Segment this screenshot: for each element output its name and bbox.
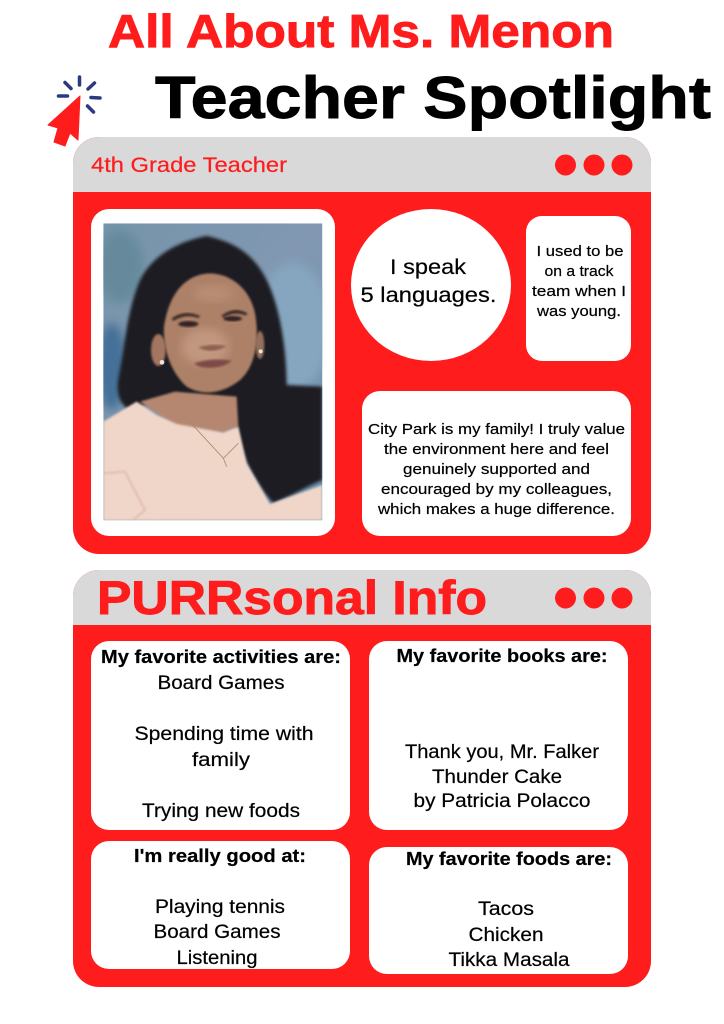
card: favorite books: My favorite books are: [396,646,608,666]
fact bubble: languages: 5 languages. [360,284,496,307]
card: favorite activities: Trying new foods [142,801,300,822]
card: favorite foods: Tikka Masala [448,950,570,971]
card: favorite activities: family [192,750,251,771]
card: favorite foods [369,847,628,974]
panel header bar [73,570,651,625]
quote card: City Park: encouraged by my colleagues, [381,481,612,498]
card: really good at: Board Games [154,922,280,943]
fact card: track team: was young. [536,303,621,320]
card: favorite books: by Patricia Polacco [414,791,590,812]
card: favorite foods: Chicken [468,925,544,946]
quote card: City Park [362,391,631,536]
card: favorite foods: Tacos [478,899,534,920]
card: favorite activities: Board Games [158,673,284,694]
panel: PURRsonal Info window [73,570,651,987]
title: All About Ms. Menon [108,5,614,57]
quote card: City Park: which makes a huge difference. [377,501,615,518]
panel body [73,570,651,987]
card: really good at [91,841,350,969]
fact card: track team [526,216,631,361]
fact bubble: languages [351,209,511,361]
card: favorite books [369,641,628,830]
section heading: PURRsonal Info [97,571,487,624]
card: favorite activities: Spending time with [134,724,314,745]
card: really good at: Listening [176,948,258,969]
card: really good at: Playing tennis [155,897,285,918]
window dots [555,154,632,176]
card: favorite foods: My favorite foods are: [406,849,612,869]
card: favorite books: Thunder Cake [432,767,562,788]
subtitle: Teacher Spotlight [155,65,711,131]
card: favorite books: Thank you, Mr. Falker [405,742,600,763]
window dots [555,588,632,608]
fact card: track team: on a track [544,263,614,280]
photo of Ms. Menon [97,223,330,520]
card: favorite activities [91,641,350,830]
fact card: track team: team when I [532,283,626,300]
quote card: City Park: City Park is my family! I truly value [368,421,625,438]
panel header bar [73,137,651,192]
quote card: City Park: genuinely supported and [403,461,590,478]
icon: cursor click [48,77,100,146]
fact card: track team: I used to be [536,243,624,260]
card: really good at: I'm really good at: [134,846,306,866]
fact bubble: languages: I speak [390,256,467,279]
photo card [91,209,335,536]
panel: teacher window [73,137,651,554]
card: favorite activities: My favorite activities are: [101,647,341,667]
panel body [73,137,651,554]
grade label: 4th Grade Teacher [91,154,287,177]
quote card: City Park: the environment here and feel [384,441,609,458]
